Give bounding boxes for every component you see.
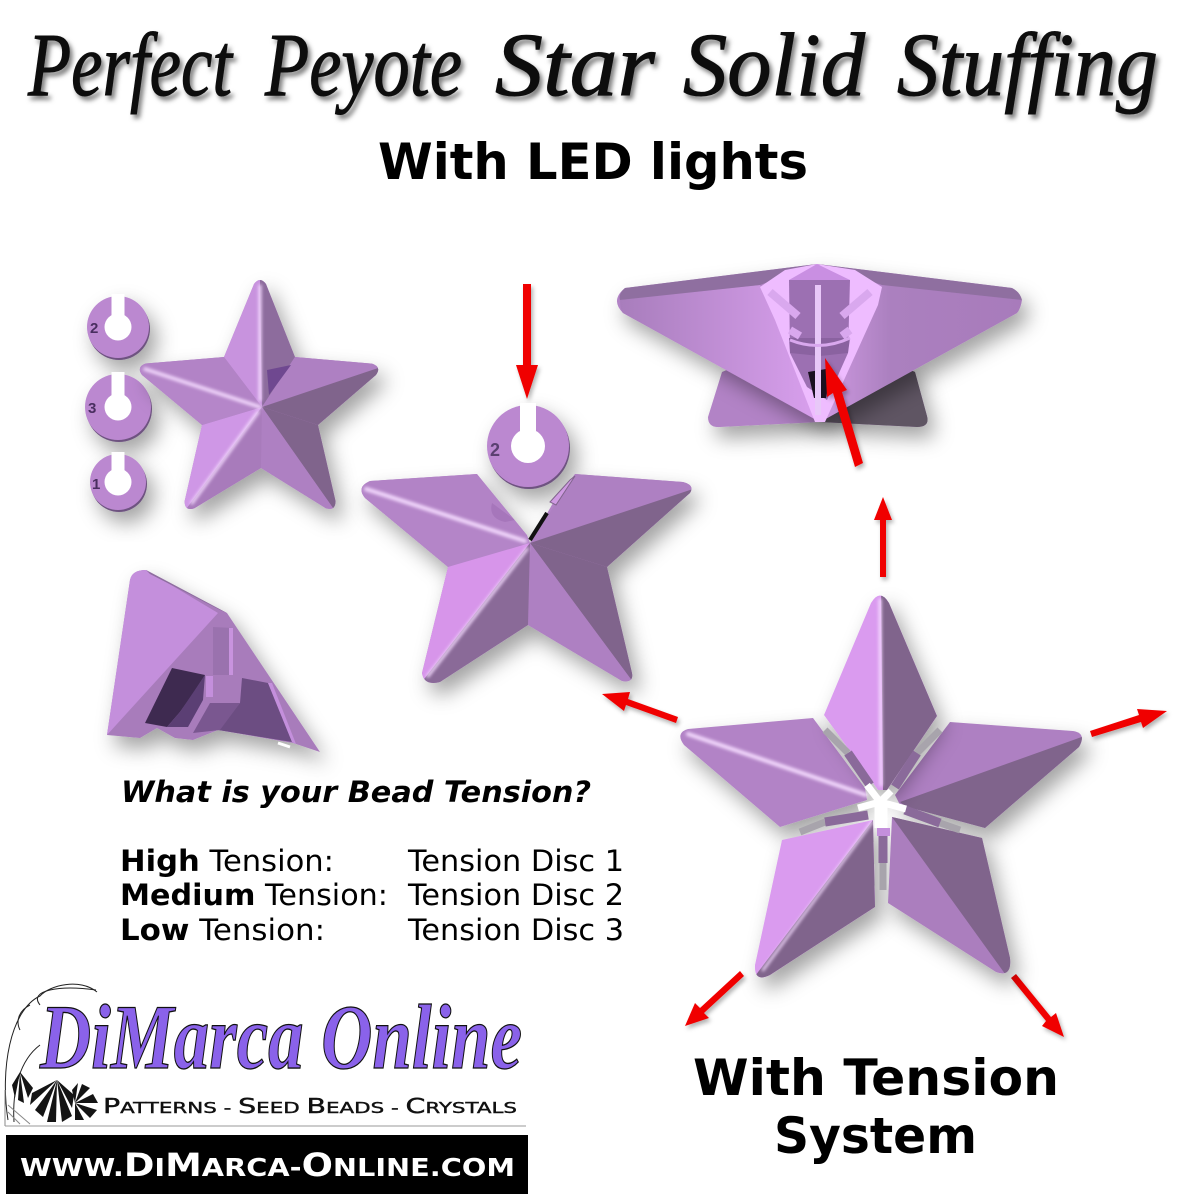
disc 1 row: Tension Disc 1 xyxy=(407,844,624,878)
title: Stuffing xyxy=(897,16,1158,115)
title: Peyote xyxy=(264,16,462,115)
disc 2 xyxy=(87,294,150,360)
top arm xyxy=(824,585,945,795)
rear legs xyxy=(708,330,928,427)
disc 3: 3 xyxy=(88,400,96,417)
red arrow: lower left xyxy=(685,971,744,1026)
wings xyxy=(617,264,1021,422)
question heading: What is your Bead Tension? xyxy=(121,775,591,809)
red arrow: right xyxy=(1090,709,1167,737)
disc 3 xyxy=(85,372,152,442)
title: Star xyxy=(495,16,656,115)
logo wordmark: DiMarca Online xyxy=(39,986,522,1088)
high tension row: High Tension: xyxy=(120,844,334,878)
red arrow: up xyxy=(874,497,892,577)
low tension row: Low Tension: xyxy=(120,913,325,947)
tension discs xyxy=(85,294,152,512)
logo tagline: P ATTERNS - S EED B EADS - C RYSTALS xyxy=(103,1094,517,1118)
ridge highlights xyxy=(688,600,881,970)
logo xyxy=(5,984,528,1194)
title: Perfect xyxy=(27,16,234,115)
star: top point removed xyxy=(360,473,706,704)
logo url bar: WWW. DIMARCA- ONLINE.COM xyxy=(20,1146,515,1184)
star: assembled solid xyxy=(140,280,394,529)
logo url bar xyxy=(6,1135,528,1194)
tension disc 2 being inserted xyxy=(487,403,570,489)
logo ornament curves xyxy=(5,984,97,1126)
logo shell xyxy=(12,1072,98,1122)
bead tension text xyxy=(120,775,624,947)
opening interior xyxy=(760,264,882,422)
red arrow: down to disc xyxy=(516,284,538,399)
disc 2: 2 xyxy=(90,320,98,337)
with tension system caption: System xyxy=(774,1107,977,1165)
with tension system caption xyxy=(693,1049,1059,1165)
title xyxy=(27,16,1158,115)
medium tension row: Medium Tension: xyxy=(120,878,388,912)
disc 3 row: Tension Disc 3 xyxy=(407,913,624,947)
with tension system caption: With Tension xyxy=(693,1049,1059,1107)
star: rear view with opening xyxy=(617,264,1022,427)
subtitle: With LED lights xyxy=(378,133,808,191)
disc 2 row: Tension Disc 2 xyxy=(407,878,624,912)
red arrow: left xyxy=(602,692,678,723)
disc 1: 1 xyxy=(92,476,100,493)
star piece cross-section xyxy=(107,570,320,752)
left arm xyxy=(680,718,867,827)
white central gap xyxy=(858,785,906,828)
right arm xyxy=(895,722,1090,850)
red arrow: lower right xyxy=(1011,974,1064,1037)
lower left arm xyxy=(752,820,880,990)
disc 1 xyxy=(90,452,147,512)
star: exploded with tension system xyxy=(680,585,1090,990)
lower right arm xyxy=(888,817,1020,978)
tension disc 2 being inserted: 2 xyxy=(490,440,500,460)
red arrow: into opening xyxy=(825,358,863,467)
title: Solid xyxy=(683,16,866,115)
tension connectors xyxy=(800,730,960,890)
